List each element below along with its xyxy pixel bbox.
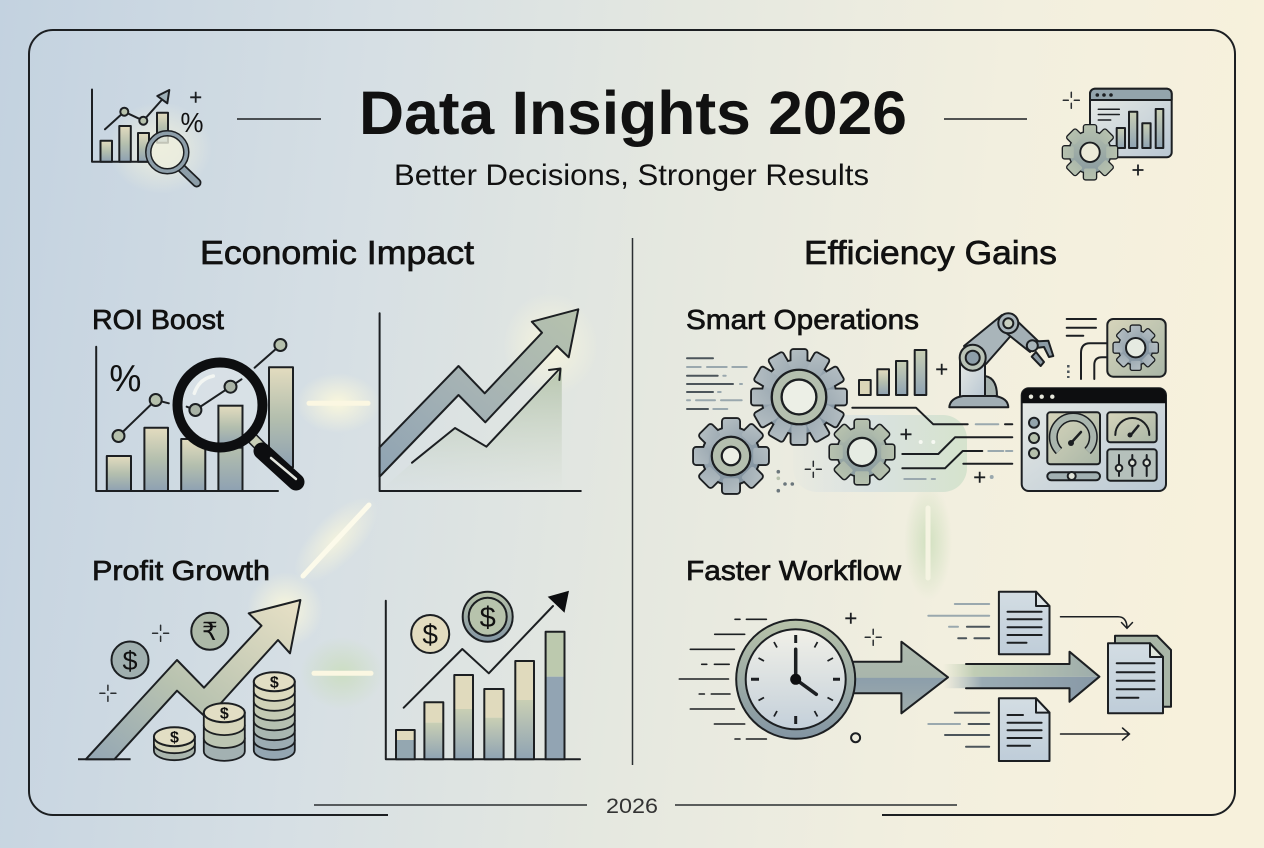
header icon: chart with magnifier — [92, 90, 212, 194]
stacked bar chart with coins: $ — [422, 619, 438, 650]
merged documents — [1108, 636, 1171, 713]
slider panel — [1107, 449, 1157, 481]
gear box and connectors — [1067, 319, 1166, 379]
connector glow: diagonal — [281, 484, 391, 596]
gauge panel — [1047, 412, 1100, 464]
connector glow: roi — [296, 373, 380, 433]
footer line right — [675, 804, 957, 806]
speed lines — [679, 619, 766, 739]
document bottom — [928, 698, 1050, 761]
center arrow: second — [943, 652, 1099, 702]
small coin stack: $ — [170, 730, 179, 746]
panel: profit growth — [78, 555, 580, 761]
small gauge panel — [1107, 412, 1157, 442]
footer year: 2026 — [606, 795, 658, 818]
bar chart with magnifier — [96, 339, 296, 491]
title: Data Insights 2026 — [359, 79, 907, 147]
small coin stack — [154, 727, 195, 760]
label: profit growth: Profit Growth — [92, 555, 270, 586]
stacked bar chart with coins: $ — [480, 602, 496, 634]
growth arrow chart — [380, 293, 598, 491]
tall coin stack — [254, 672, 295, 760]
dashboard window — [1022, 388, 1166, 491]
document top — [928, 592, 1050, 654]
data lines — [687, 358, 747, 409]
label: smart operations: Smart Operations — [686, 304, 919, 335]
subtitle: Better Decisions, Stronger Results — [394, 159, 869, 192]
circuit traces — [776, 408, 1012, 493]
bar chart with magnifier: % — [109, 358, 141, 400]
robot arm — [949, 313, 1053, 407]
arrow with coin stacks — [78, 572, 323, 761]
mini bars — [859, 350, 947, 395]
center divider — [632, 238, 634, 765]
tall coin stack: $ — [270, 674, 279, 692]
accents — [845, 613, 881, 742]
label: faster workflow: Faster Workflow — [686, 555, 902, 586]
medium coin stack — [204, 703, 245, 761]
flow arrow top — [1060, 617, 1132, 628]
panel: roi boost — [92, 293, 598, 491]
label: roi boost: ROI Boost — [92, 304, 224, 335]
stacked bar chart with coins — [386, 591, 580, 759]
connector glow: profit — [300, 637, 384, 709]
medium coin stack: $ — [220, 706, 229, 722]
flow arrow bottom — [1060, 728, 1129, 740]
arrow with coin stacks: ₹ — [202, 617, 218, 646]
section heading: efficiency gains: Efficiency Gains — [804, 234, 1057, 271]
gears — [694, 350, 894, 493]
connector glow: workflow — [904, 484, 952, 600]
header divider left — [237, 118, 321, 120]
header icon: chart with magnifier: % — [180, 107, 204, 138]
panel: smart operations — [686, 304, 1166, 493]
clock arrow — [845, 642, 948, 713]
header icon: dashboard with gear — [1063, 89, 1172, 179]
section heading: economic impact: Economic Impact — [200, 234, 474, 271]
arrow with coin stacks: $ — [122, 646, 138, 676]
clock — [736, 620, 855, 739]
header divider right — [944, 118, 1027, 120]
glowing backing panel — [793, 415, 967, 492]
footer line left — [314, 804, 587, 806]
panel: faster workflow — [679, 555, 1171, 761]
